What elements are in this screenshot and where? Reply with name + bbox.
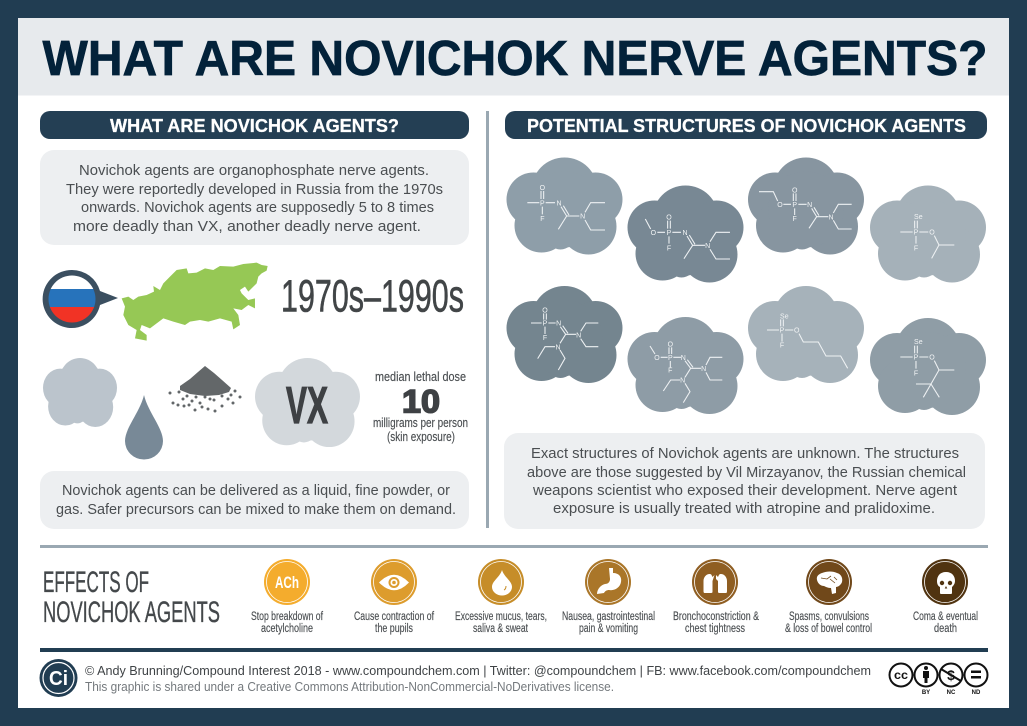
effect: bronchoconstriction	[673, 559, 759, 635]
structure 2: N	[682, 230, 688, 237]
effect: spasms: Spasms, convulsions	[789, 611, 869, 623]
effect: nausea: Nausea, gastrointestinal	[562, 611, 655, 623]
effect: bronchoconstriction: chest tightness	[685, 623, 745, 635]
structure 4: Se	[914, 214, 923, 221]
effect: acetylcholine: acetylcholine	[261, 623, 313, 635]
structure 6	[628, 317, 744, 414]
structure 3: O	[777, 202, 783, 209]
date range: 1970s–1990s	[281, 270, 464, 322]
license note: This graphic is shared under a Creative Commons Attribution-NonCommercial-NoDerivatives license.	[85, 680, 614, 694]
icon: creative commons badges	[890, 664, 988, 696]
structure 1: P	[540, 200, 545, 207]
icon: liquid drop	[125, 395, 163, 459]
text block: introduction	[40, 150, 469, 245]
effect: acetylcholine: Stop breakdown of	[251, 611, 324, 623]
text block: introduction: They were reportedly developed in Russia from the 1970s	[66, 182, 443, 198]
icon: creative commons badges: $	[947, 667, 955, 683]
panel: what are novichok agents	[40, 111, 469, 529]
structure 6: O	[668, 342, 674, 349]
icon: powder	[168, 366, 242, 412]
logo: compound interest: Ci	[49, 668, 68, 690]
icon: russian flag pin	[43, 270, 118, 328]
effect: mucus: Excessive mucus, tears,	[455, 611, 547, 623]
logo: compound interest	[40, 659, 78, 697]
credits: © Andy Brunning/Compound Interest 2018 - www.compoundchem.com | Twitter: @compoundchem | FB: www.facebook.com/compoundchem	[85, 663, 871, 678]
structure 2	[628, 186, 744, 282]
effect: coma	[913, 559, 978, 635]
structure 8: Se	[914, 339, 923, 346]
structure 1: F	[540, 216, 544, 223]
structure 6: N	[680, 378, 685, 385]
structure 5: N	[576, 333, 581, 340]
structure 7: P	[780, 328, 785, 335]
effect: coma: Coma & eventual	[913, 611, 978, 623]
effect: pupils	[354, 559, 435, 635]
effect: coma: death	[934, 623, 957, 635]
structure 3	[748, 158, 864, 254]
text block: introduction: Novichok agents are organophosphate nerve agents.	[79, 163, 429, 179]
structure 5: F	[543, 335, 547, 342]
heading: effects: NOVICHOK AGENTS	[43, 596, 220, 629]
structure 4	[870, 186, 986, 282]
structure 7: O	[794, 328, 800, 335]
text block: structures note	[504, 433, 985, 529]
text block: delivery: Novichok agents can be delivered as a liquid, fine powder, or	[62, 483, 450, 499]
structure 4: P	[914, 230, 919, 237]
structure 2: P	[667, 230, 672, 237]
title band	[18, 18, 1009, 96]
text block: structures note: above are those suggested by Vil Mirzayanov, the Russian chemical	[527, 465, 966, 481]
structure 5: P	[543, 321, 548, 328]
heading: potential structures: POTENTIAL STRUCTURES OF NOVICHOK AGENTS	[527, 115, 966, 136]
structure 6: N	[681, 355, 686, 362]
structure 4: F	[914, 245, 918, 252]
lethal dose stat: median lethal dose	[375, 369, 466, 384]
effect: nausea	[562, 559, 655, 635]
structure 7: Se	[780, 313, 789, 320]
heading: effects: EFFECTS OF	[43, 566, 149, 599]
text block: structures note: weapons scientist who exposed their development. Nerve agent	[532, 483, 957, 499]
effect: pupils: the pupils	[375, 623, 413, 635]
structure 1: N	[556, 200, 562, 207]
lethal dose stat	[373, 369, 468, 444]
title: WHAT ARE NOVICHOK NERVE AGENTS?	[42, 32, 988, 86]
structure 1: N	[580, 214, 585, 221]
structure 3: N	[828, 214, 834, 221]
text block: delivery: gas. Safer precursors can be mixed to make them on demand.	[56, 502, 456, 518]
effect: spasms: & loss of bowel control	[785, 623, 872, 635]
footer	[40, 659, 988, 697]
text block: introduction: onwards. Novichok agents are supposedly 5 to 8 times	[81, 200, 434, 216]
effect: acetylcholine: ACh	[275, 574, 299, 592]
effect: mucus: saliva & sweat	[473, 623, 529, 635]
lethal dose stat: milligrams per person	[373, 415, 468, 430]
lethal dose stat: (skin exposure)	[387, 429, 455, 444]
structure 7: F	[780, 343, 784, 350]
structure 6: P	[668, 355, 673, 362]
structure 5: O	[542, 308, 548, 315]
structure 6: F	[668, 368, 672, 375]
text block: structures note: Exact structures of Novichok agents are unknown. The structures	[531, 446, 959, 462]
structure 8	[870, 318, 986, 415]
icon: vx cloud	[255, 358, 360, 447]
structure 7	[748, 286, 864, 383]
effect: acetylcholine	[251, 559, 324, 635]
structure 8: F	[914, 370, 918, 377]
icon: gas cloud	[43, 358, 117, 427]
structure 6: N	[701, 366, 706, 373]
structure 2: F	[667, 245, 671, 252]
icon: map of russia	[122, 263, 268, 341]
structure 2: O	[651, 230, 657, 237]
text block: structures note: exposure is usually treated with atropine and pralidoxime.	[553, 501, 935, 517]
heading: what are novichok agents: WHAT ARE NOVICHOK AGENTS?	[110, 115, 399, 136]
effect: pupils: Cause contraction of	[354, 611, 435, 623]
structure 5: N	[556, 321, 561, 328]
effect: bronchoconstriction: Bronchoconstriction &	[673, 611, 759, 623]
panel: potential structures	[504, 111, 987, 529]
heading: what are novichok agents	[40, 111, 469, 139]
effect: nausea: pain & vomiting	[579, 623, 638, 635]
structure 3: N	[807, 202, 812, 209]
icon: creative commons badges: ND	[972, 690, 981, 696]
structure 8: P	[914, 355, 919, 362]
icon: vx cloud: VX	[286, 377, 328, 435]
text block: introduction: more deadly than VX, another deadly nerve agent.	[73, 219, 421, 235]
structure 5: N	[555, 344, 561, 351]
structure 4: O	[929, 230, 935, 237]
structure 2: O	[666, 215, 672, 222]
icon: creative commons badges: BY	[922, 690, 930, 696]
structure 3: F	[793, 216, 797, 223]
panel: effects	[43, 559, 978, 635]
effect: mucus	[455, 559, 547, 635]
effect: spasms	[785, 559, 872, 635]
structure 8: O	[929, 355, 935, 362]
structure 3: O	[792, 187, 798, 194]
structure 1: O	[540, 185, 546, 192]
icon: creative commons badges: cc	[894, 670, 909, 682]
structure 1	[506, 158, 622, 254]
text block: delivery	[40, 471, 469, 529]
structure 3: P	[792, 202, 797, 209]
structure 5	[506, 286, 622, 383]
icon: creative commons badges: NC	[947, 690, 956, 696]
lethal dose stat: 10	[402, 384, 440, 420]
heading: effects	[43, 566, 220, 629]
structure 6: O	[654, 355, 660, 362]
structure 2: N	[705, 243, 710, 250]
